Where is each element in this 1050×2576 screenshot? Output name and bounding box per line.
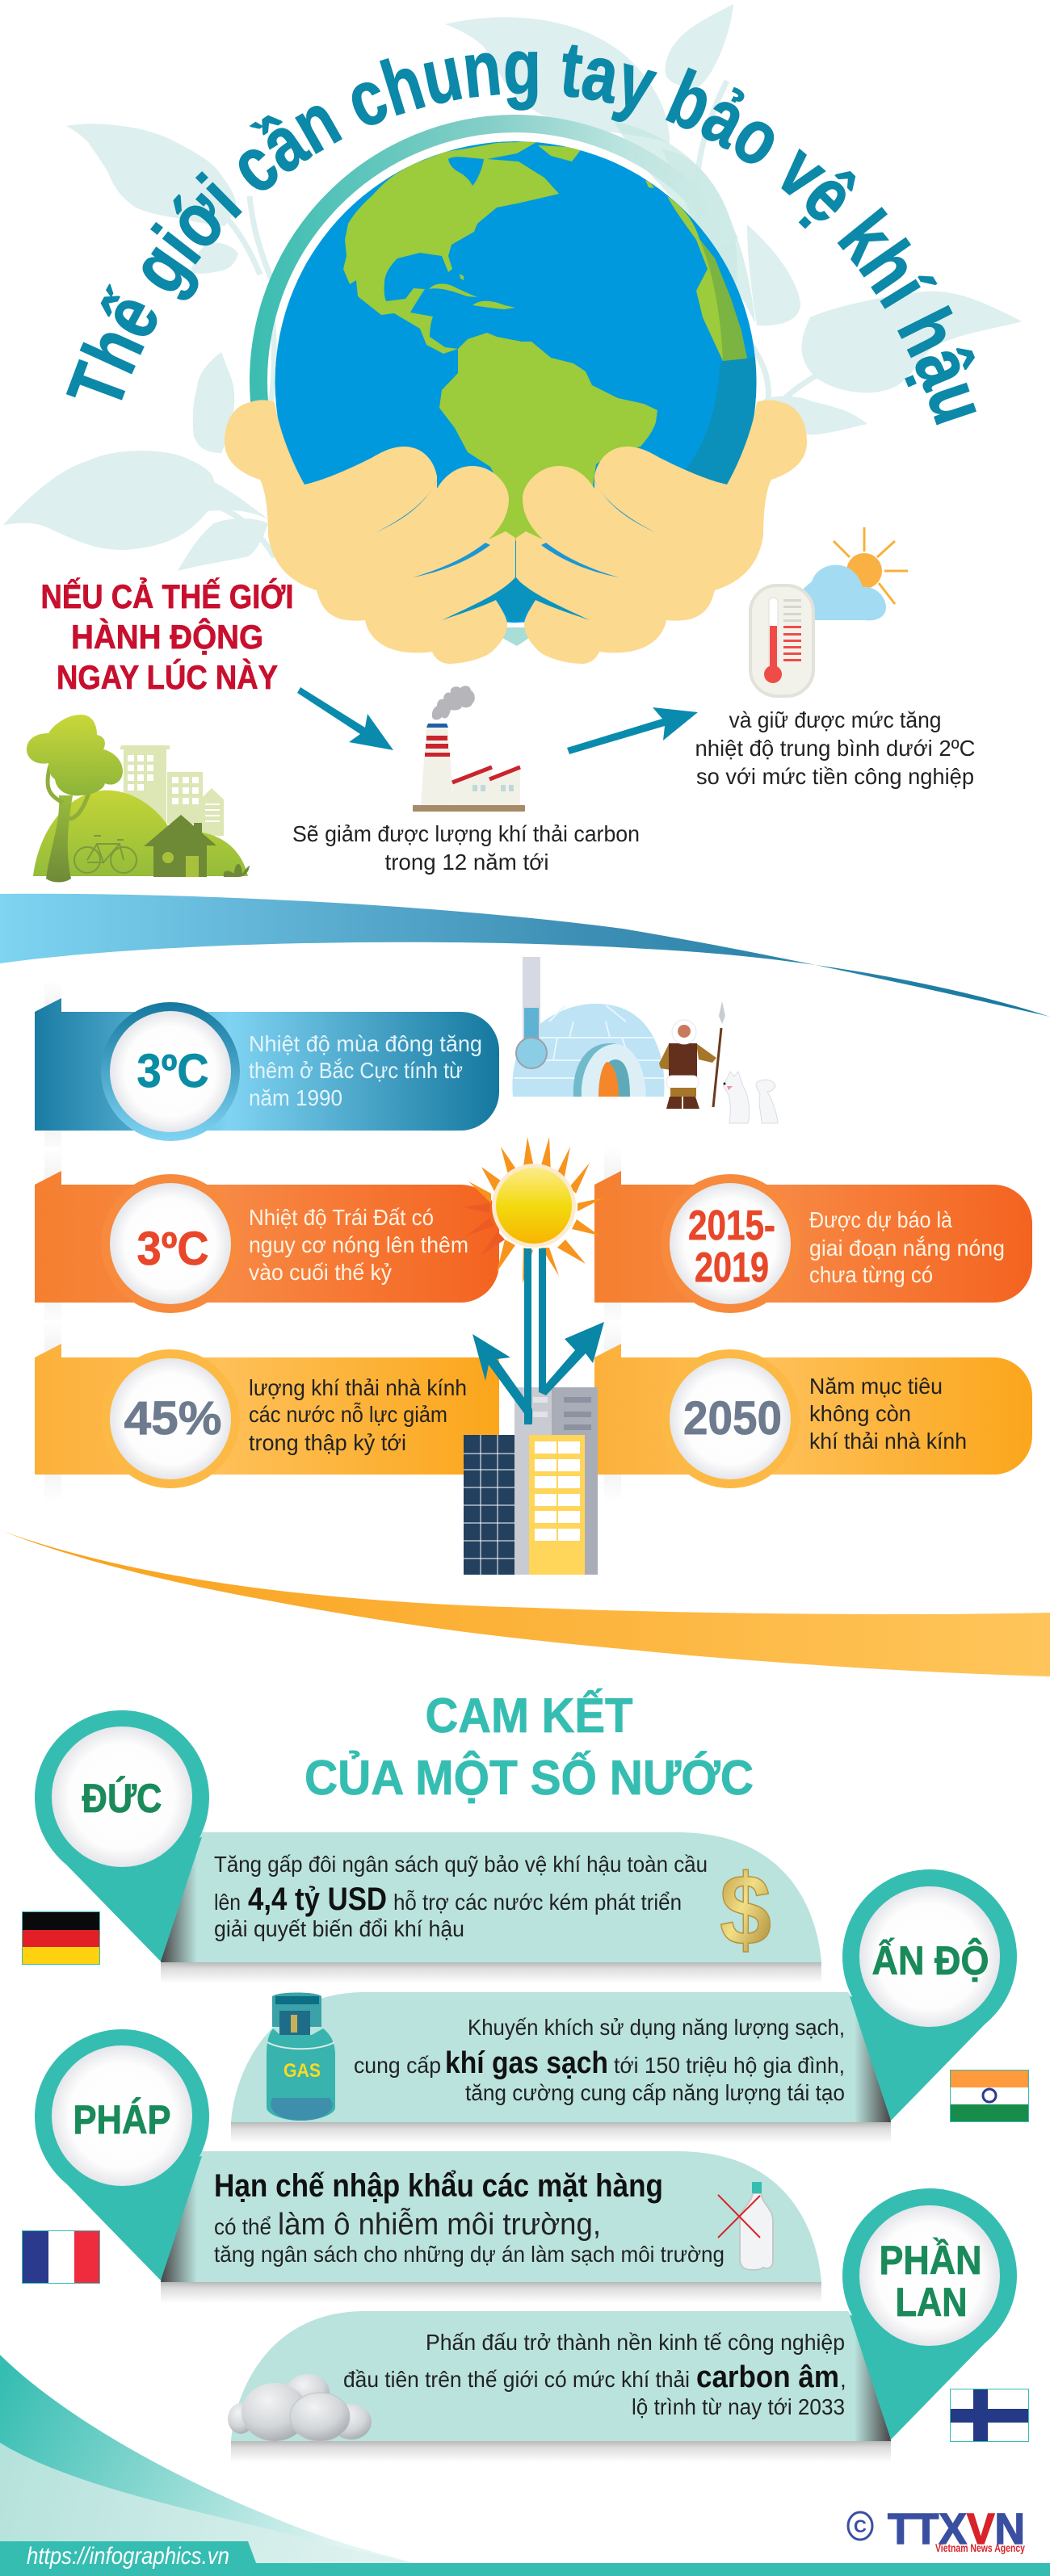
logo: TTXVN: TTXVN [888, 2505, 1025, 2553]
pin: France: PHÁP [73, 2097, 171, 2142]
panel: 3ºC Arctic winter [35, 980, 499, 1157]
commitment text: hỗ trợ các nước kém phát triển [393, 1890, 682, 1915]
icon: gas cylinder: GAS [284, 2060, 321, 2082]
year badge: 2015- [688, 1202, 775, 1249]
description [249, 1031, 482, 1110]
icon: green city [27, 715, 250, 882]
icon: sun and cloud [797, 527, 908, 620]
panel: France [161, 2151, 821, 2303]
text: temperature goal [695, 707, 976, 789]
icon: sun [464, 1137, 604, 1284]
description: Nhiệt độ mùa đông tăng [249, 1031, 482, 1056]
icon: gas cylinder [267, 1993, 335, 2121]
arrow to factory [297, 687, 393, 750]
icon: crossed-out plastic bottle [718, 2182, 773, 2270]
description: thêm ở Bắc Cực tính từ [249, 1058, 463, 1083]
description: Năm mục tiêu [809, 1374, 943, 1399]
year badge [661, 1174, 800, 1313]
number badge: 3ºC [137, 1045, 208, 1097]
continent: South America [439, 333, 657, 543]
text: carbon reduction: trong 12 năm tới [384, 850, 549, 875]
description: Được dự báo là [809, 1207, 952, 1232]
commitment text: cung cấp [354, 2053, 441, 2078]
icon: thermometer [750, 585, 813, 696]
pin: Germany: ĐỨC [82, 1776, 162, 1821]
description: năm 1990 [249, 1085, 342, 1110]
description: chưa từng có [809, 1262, 933, 1287]
year badge: 2050 [683, 1392, 782, 1445]
commitment text [354, 2015, 845, 2105]
commitment text [214, 2168, 724, 2267]
globe [275, 141, 767, 623]
globe held in hands [225, 121, 807, 664]
commitment text: Hạn chế nhập khẩu các mặt hàng [214, 2168, 663, 2204]
heading: red call to action: NGAY LÚC NÀY [57, 657, 278, 696]
commitment text [214, 1852, 708, 1941]
panel: 2050 [594, 1320, 1032, 1502]
pin: India: ẤN ĐỘ [872, 1937, 989, 1983]
panel: 3ºC global warming [35, 1147, 499, 1326]
flag: Finland [950, 2389, 1029, 2442]
text: temperature goal: và giữ được mức tăng [729, 707, 942, 732]
flag: India [950, 2070, 1029, 2122]
commitment text: , [840, 2367, 846, 2392]
islands: Caribbean [429, 180, 654, 309]
pin: Germany [35, 1710, 209, 1961]
commitment text: tăng cường cung cấp năng lượng tái tạo [465, 2080, 845, 2105]
panel: 2015-2019 [594, 1147, 1032, 1326]
background leaves [3, 4, 1022, 571]
heading: red call to action: NẾU CẢ THẾ GIỚI [40, 577, 294, 615]
bottom teal swoosh [0, 2355, 1050, 2576]
commitment text: Khuyến khích sử dụng năng lượng sạch, [468, 2015, 845, 2040]
commitment text: Phấn đấu trở thành nền kinh tế công nghiệp [426, 2330, 845, 2355]
icon: dollar sign: $ [720, 1855, 771, 1966]
year badge: 2019 [695, 1244, 769, 1291]
description [249, 1205, 468, 1285]
icon: igloo and cold thermometer [512, 957, 665, 1097]
orange swoosh divider [0, 1530, 1050, 1676]
description [249, 1375, 467, 1455]
arrows: sunlight reflected by building [472, 1248, 604, 1424]
footer tab with URL: https://infographics.vn [27, 2543, 229, 2570]
description: khí thải nhà kính [809, 1429, 967, 1454]
pin: Finland [842, 2188, 1017, 2440]
commitment text: giải quyết biến đổi khí hậu [214, 1916, 464, 1941]
pin: Finland: PHẦN [879, 2238, 982, 2283]
number badge [101, 1174, 240, 1313]
continent: Africa [667, 196, 747, 361]
commitment text: làm ô nhiễm môi trường, [278, 2207, 601, 2242]
flag: Germany [22, 1911, 100, 1965]
panel: Germany [161, 1832, 821, 1983]
panel: India [231, 1992, 891, 2143]
arrow to thermometer [567, 707, 698, 754]
pin: Finland: LAN [895, 2280, 968, 2325]
description: vào cuối thế kỷ [249, 1260, 392, 1285]
description: giai đoạn nắng nóng [809, 1236, 1005, 1261]
commitment text: lên [214, 1890, 241, 1915]
commitment text: có thể [214, 2214, 271, 2239]
number badge: 3ºC [137, 1223, 208, 1275]
number badge: 45% [124, 1392, 221, 1445]
number badge [101, 1349, 240, 1488]
blue swoosh divider [0, 894, 1050, 1017]
icon: white dog [724, 1072, 778, 1123]
commitment text [343, 2330, 846, 2419]
footer tab with URL [0, 2541, 261, 2576]
continent: North America [343, 141, 559, 354]
left hand [225, 400, 515, 664]
text: temperature goal: nhiệt độ trung bình dưới 2ºC [695, 736, 976, 761]
icon: factory [413, 686, 525, 812]
heading: commitments: CAM KẾT [425, 1689, 633, 1743]
heading: commitments [304, 1689, 754, 1805]
commitment text: 4,4 tỷ USD [248, 1882, 387, 1917]
commitment text: tới 150 triệu hộ gia đình, [614, 2053, 845, 2078]
description [809, 1374, 967, 1454]
description: không còn [809, 1401, 911, 1426]
number badge [101, 1002, 240, 1141]
heading: red call to action: HÀNH ĐỘNG [71, 617, 263, 656]
commitment text: khí gas sạch [445, 2046, 608, 2080]
heading: red call to action [40, 577, 294, 696]
text: carbon reduction [292, 821, 640, 875]
panel: 45% [35, 1320, 499, 1502]
pin: France [35, 2029, 209, 2280]
pin: India [842, 1869, 1017, 2121]
year badge [661, 1349, 800, 1488]
description: Nhiệt độ Trái Đất có [249, 1205, 434, 1230]
text: carbon reduction: Sẽ giảm được lượng khí thải carbon [292, 821, 640, 846]
right hand [516, 400, 807, 664]
description [809, 1207, 1005, 1287]
description: trong thập kỷ tới [249, 1430, 406, 1455]
icon: Inuit man with spear [659, 1001, 725, 1109]
commitment text: lộ trình từ nay tới 2033 [632, 2394, 845, 2419]
commitment text: carbon âm [696, 2360, 839, 2394]
commitment text: đầu tiên trên thế giới có mức khí thải [343, 2367, 690, 2392]
description: các nước nỗ lực giảm [249, 1402, 447, 1427]
commitment text: Tăng gấp đôi ngân sách quỹ bảo vệ khí hậu toàn cầu [214, 1852, 708, 1877]
logo: TTXVN: C [854, 2516, 867, 2536]
icon: office building with solar panels [464, 1387, 598, 1575]
description: nguy cơ nóng lên thêm [249, 1232, 468, 1257]
icon: grey clouds [228, 2374, 372, 2441]
description: lượng khí thải nhà kính [249, 1375, 467, 1400]
commitment text: tăng ngân sách cho những dự án làm sạch môi trường [214, 2242, 724, 2267]
title: Thế giới cần chung tay bảo vệ khí hậu [66, 44, 976, 426]
text: temperature goal: so với mức tiền công nghiệp [696, 764, 974, 789]
heading: commitments: CỦA MỘT SỐ NƯỚC [304, 1751, 754, 1805]
panel: Finland [228, 2311, 891, 2462]
flag: France [22, 2230, 100, 2284]
